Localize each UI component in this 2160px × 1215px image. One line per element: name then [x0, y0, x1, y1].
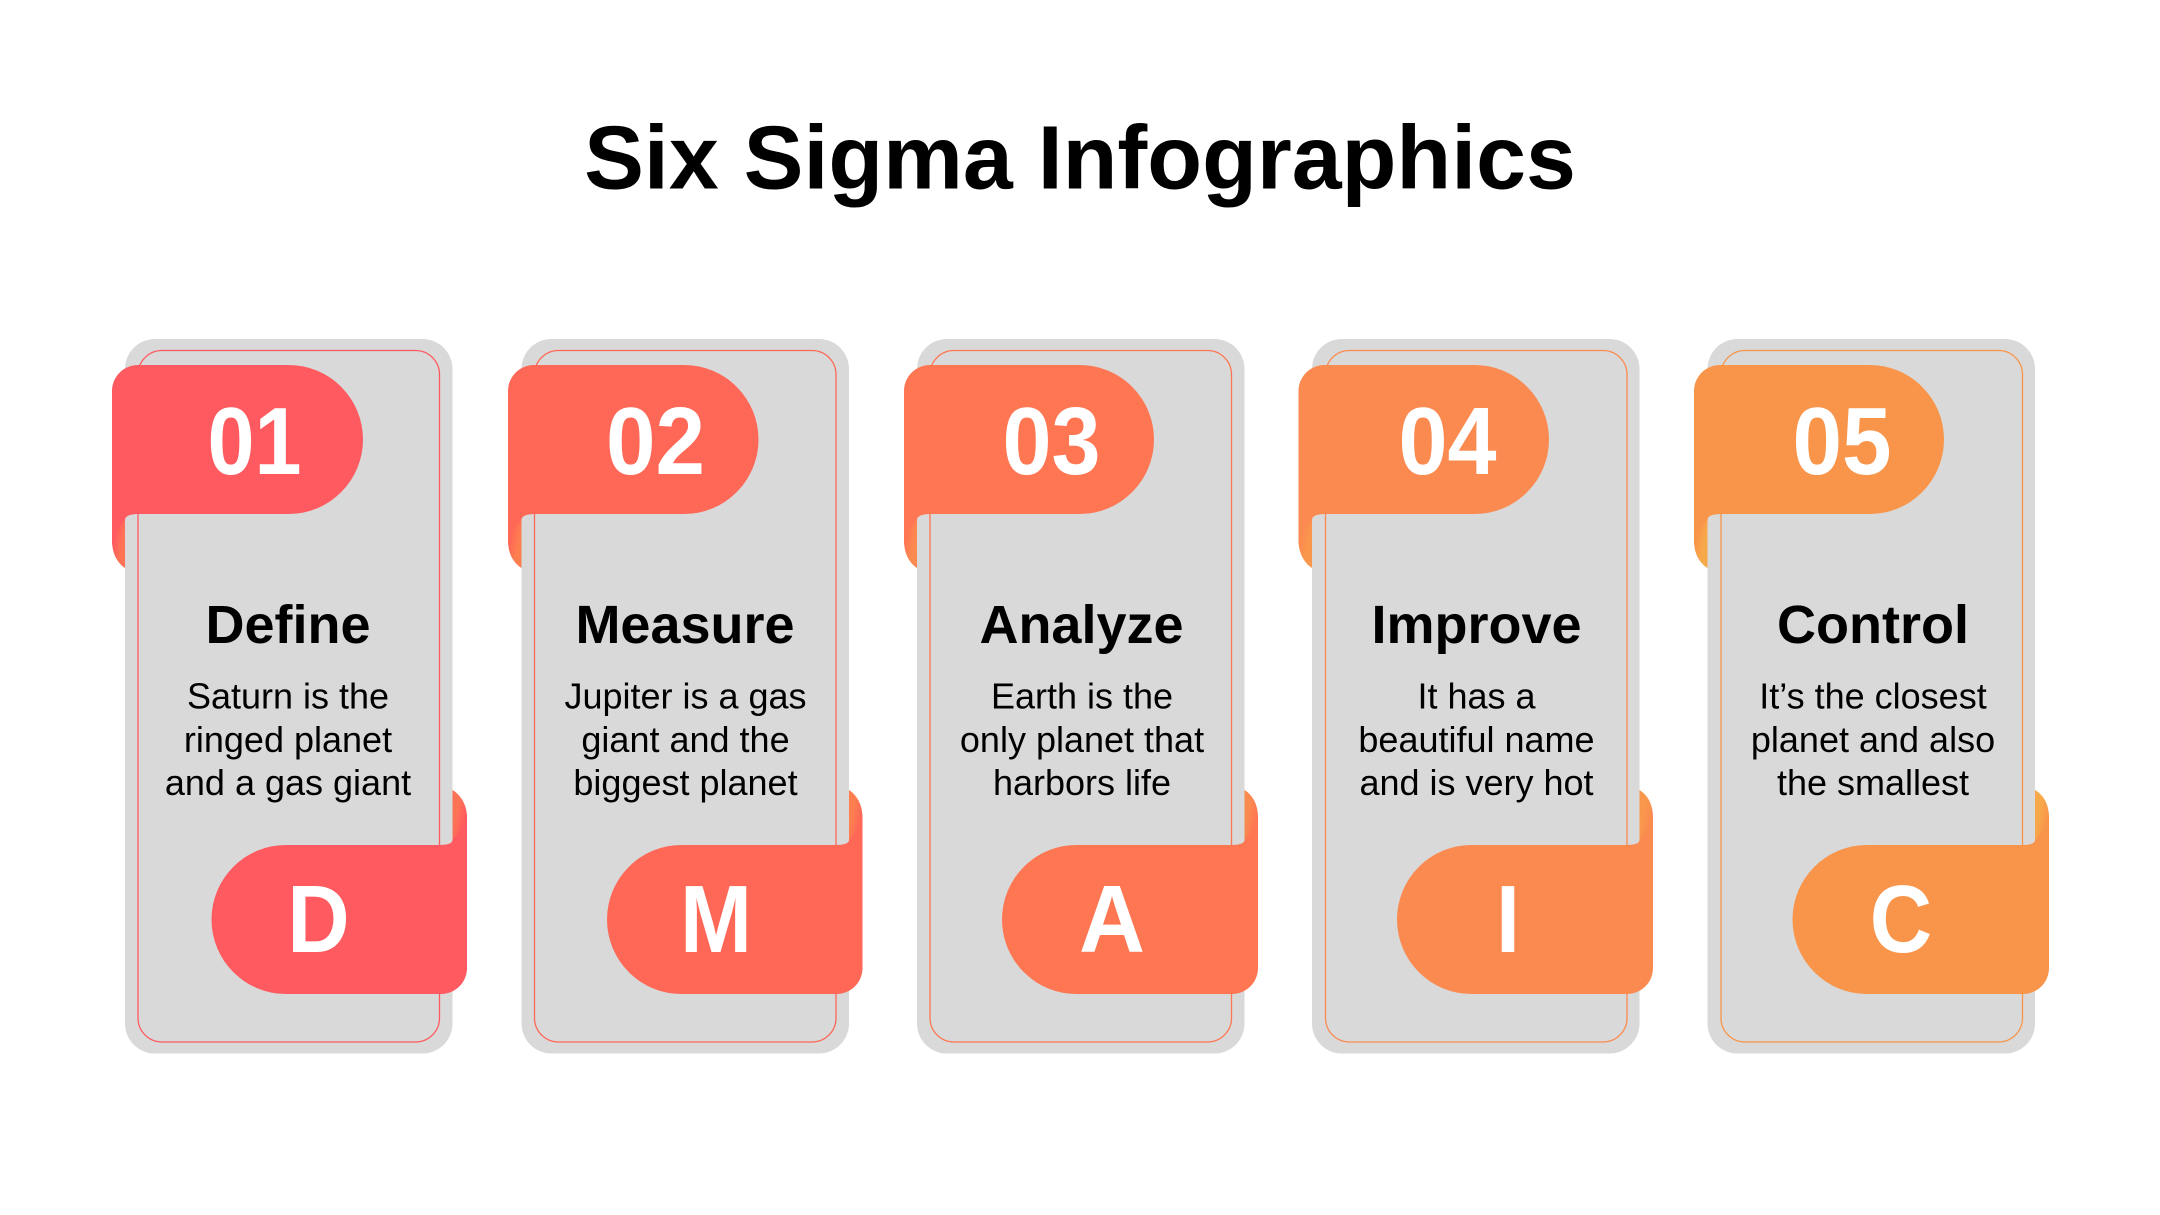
description: It’s the closest [1759, 676, 1987, 716]
number ribbon [1298, 365, 1549, 545]
letter ribbon fold [2035, 790, 2049, 860]
letter ribbon [1792, 815, 2049, 994]
description: It has a [1417, 676, 1537, 716]
letter: C [1870, 866, 1932, 973]
card inner outline [1326, 350, 1627, 1042]
heading: Define [205, 595, 371, 655]
number: 01 [208, 388, 302, 495]
description: biggest planet [573, 762, 798, 803]
number: 05 [1792, 388, 1892, 495]
letter ribbon [1397, 815, 1653, 994]
panel: Define card [112, 339, 467, 1054]
letter: A [1079, 866, 1145, 973]
panel: Analyze card [904, 339, 1258, 1054]
letter ribbon fold [452, 790, 467, 860]
card background [1312, 339, 1640, 1054]
number ribbon fold [112, 505, 125, 568]
title: Six Sigma Infographics [584, 108, 1576, 208]
card background [522, 339, 849, 1054]
card background [917, 339, 1244, 1054]
number ribbon [112, 365, 363, 545]
description: planet and also [1751, 719, 1995, 760]
card inner outline [534, 350, 836, 1042]
letter ribbon fold [1640, 790, 1653, 860]
heading: Control [1777, 595, 1969, 655]
description: beautiful name [1358, 719, 1595, 760]
number ribbon [904, 365, 1154, 545]
card inner outline [138, 350, 440, 1042]
letter: M [680, 866, 752, 973]
description: only planet that [960, 719, 1204, 760]
letter ribbon fold [1244, 790, 1258, 860]
card inner outline [930, 350, 1232, 1042]
number ribbon [1694, 365, 1944, 545]
panel: Control card [1694, 339, 2049, 1054]
heading: Improve [1371, 595, 1582, 655]
description: Jupiter is a gas [564, 676, 807, 716]
number ribbon fold [904, 505, 917, 568]
letter: D [287, 866, 350, 973]
number: 02 [606, 388, 705, 495]
number ribbon fold [1694, 505, 1708, 568]
description: ringed planet [184, 719, 392, 760]
letter ribbon [212, 815, 467, 994]
description: giant and the [581, 719, 790, 760]
card background [1708, 339, 2035, 1054]
description: and is very hot [1359, 762, 1594, 803]
description: harbors life [993, 762, 1171, 803]
heading: Measure [575, 595, 795, 655]
panel: Improve card [1298, 339, 1653, 1054]
number ribbon [508, 365, 758, 545]
number ribbon fold [1298, 505, 1312, 568]
description: and a gas giant [165, 762, 411, 803]
panel: Measure card [508, 339, 862, 1054]
number: 03 [1002, 388, 1100, 495]
number: 04 [1398, 388, 1496, 495]
card background [125, 339, 452, 1054]
card inner outline [1721, 350, 2022, 1042]
heading: Analyze [979, 595, 1184, 655]
description: Earth is the [991, 676, 1173, 716]
letter ribbon fold [849, 790, 862, 860]
description: the smallest [1777, 762, 1969, 803]
number ribbon fold [508, 505, 522, 568]
description: Saturn is the [187, 676, 389, 716]
letter ribbon [607, 815, 862, 994]
letter: I [1496, 866, 1520, 973]
letter ribbon [1002, 815, 1258, 994]
